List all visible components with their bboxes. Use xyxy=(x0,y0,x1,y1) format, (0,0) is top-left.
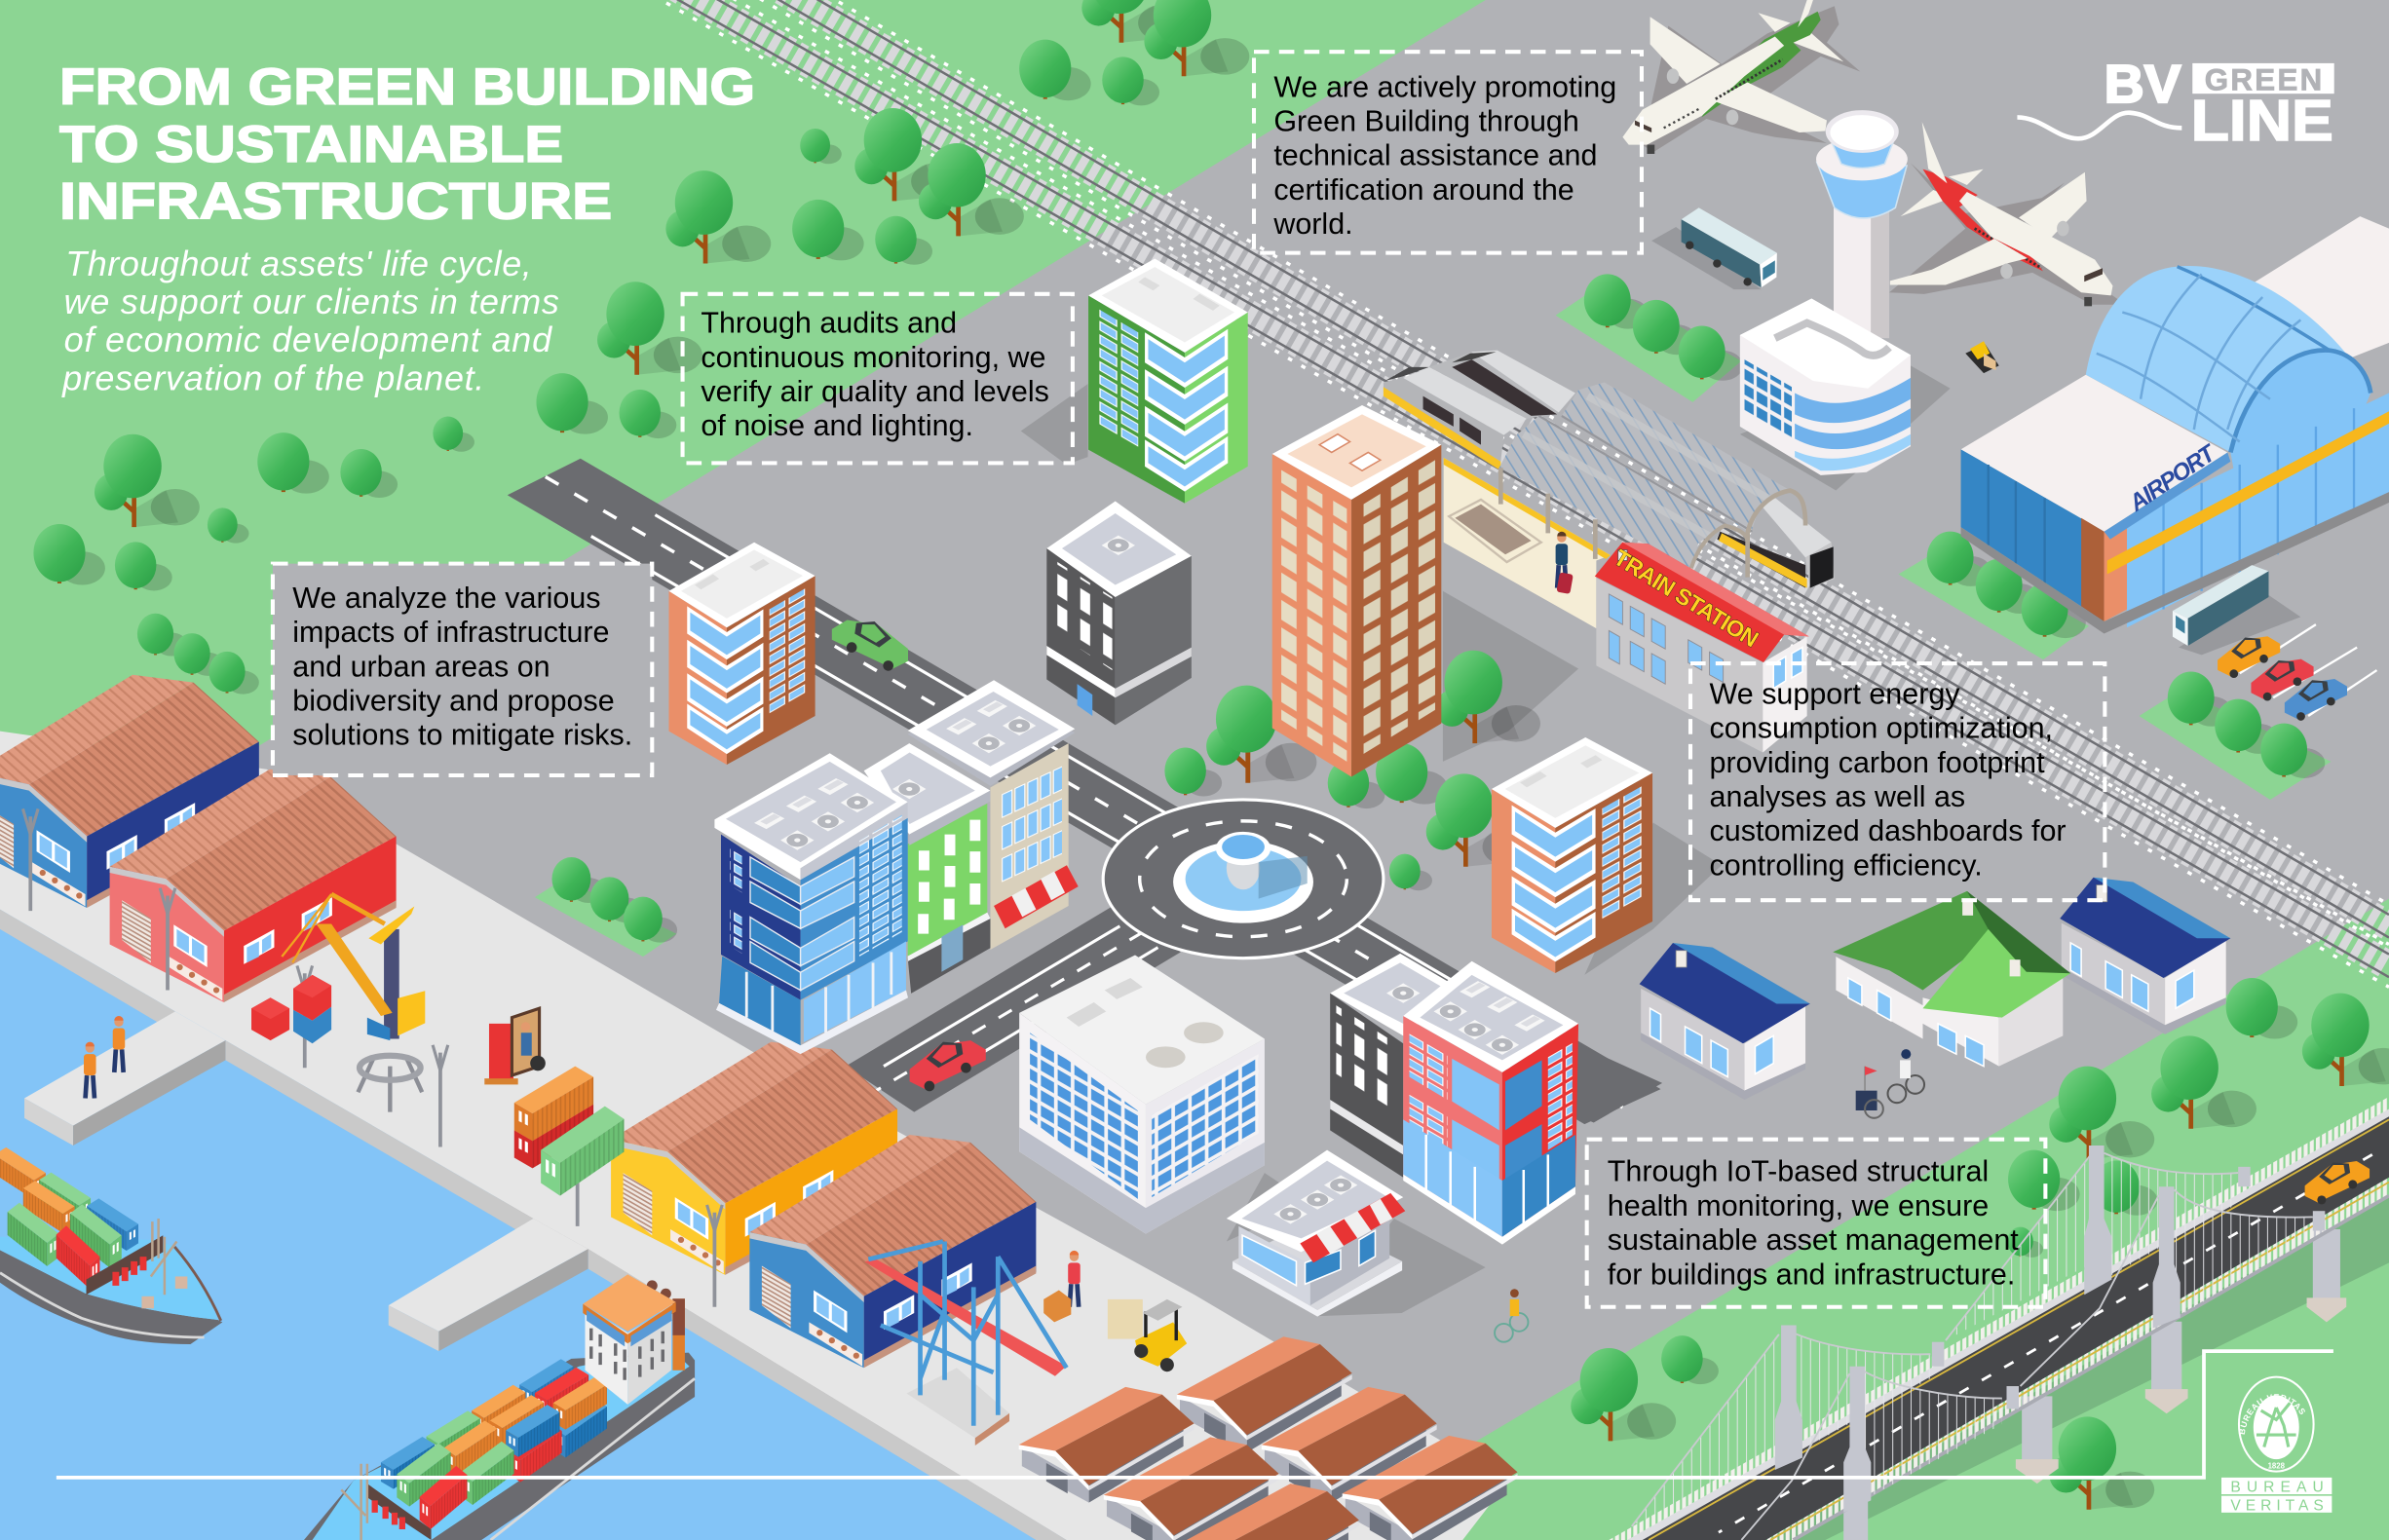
glass dome xyxy=(2086,266,2370,503)
callout: biodiversity: We analyze the various xyxy=(292,582,601,615)
cyclist with trailer xyxy=(1856,1049,1924,1118)
subtitle: we support our clients in terms xyxy=(64,282,559,321)
station platform xyxy=(1444,458,1611,628)
taxi on bridge xyxy=(2305,1161,2370,1204)
callout: energy optimization: analyses as well as xyxy=(1710,780,1965,813)
callout: green building promotion: world. xyxy=(1272,207,1353,241)
tower: tall orange xyxy=(1272,405,1441,777)
plane: green livery xyxy=(1622,0,1860,154)
airport sign: AIRPORT xyxy=(2124,439,2222,517)
street cars xyxy=(832,620,986,1091)
station shelters xyxy=(1499,383,1805,578)
callout: air quality monitoring: of noise and lighting. xyxy=(701,409,973,442)
trees: lower right park xyxy=(1571,978,2389,1510)
building: corner shop xyxy=(1227,1150,1405,1317)
callout: structural health monitoring: health monitoring, we ensure xyxy=(1608,1189,1989,1222)
callout: air quality monitoring: continuous monitoring, we xyxy=(701,341,1046,374)
trees: upper park xyxy=(33,0,1249,695)
callout: structural health monitoring: Through IoT-based structural xyxy=(1608,1155,1989,1188)
airport shuttle bus top xyxy=(1651,207,1777,289)
terminal roof xyxy=(1961,375,2227,532)
ground: green park top left xyxy=(0,0,1486,903)
callout: green building promotion: certification around the xyxy=(1273,173,1574,207)
hangers and cables xyxy=(1632,1153,2313,1526)
Bureau Veritas logo: BUREAU xyxy=(2230,1480,2324,1496)
subtitle: preservation of the planet. xyxy=(61,357,484,397)
building: green midrise xyxy=(864,743,990,994)
callout: energy optimization: We support energy xyxy=(1710,677,1960,710)
callout: energy optimization: controlling efficiency. xyxy=(1710,848,1983,882)
dock workers xyxy=(84,1016,1081,1307)
callout: energy optimization: customized dashboards for xyxy=(1710,814,2067,847)
house: green roof xyxy=(1833,891,2070,1067)
Bureau Veritas logo: BUREAU VERITAS xyxy=(2240,1394,2305,1435)
tower: small orange xyxy=(668,543,815,765)
callout: biodiversity: impacts of infrastructure xyxy=(292,616,610,649)
grass tiles xyxy=(535,283,2332,957)
parked cars xyxy=(2218,636,2347,721)
BV Green Line logo: LINE xyxy=(2191,89,2333,153)
control tower xyxy=(1816,110,1908,338)
building: blue office xyxy=(714,753,908,1054)
Bureau Veritas logo: 1828 xyxy=(2268,1461,2286,1470)
container ship left xyxy=(0,1147,222,1344)
forklift with red crates xyxy=(484,1008,546,1084)
bridge piers xyxy=(1843,1229,2346,1540)
lamp posts xyxy=(22,808,722,1307)
far car xyxy=(1717,497,1835,588)
container stack centre xyxy=(514,1067,625,1196)
subtitle xyxy=(61,244,559,397)
ground: green park bottom right xyxy=(1310,899,2389,1540)
callout: energy optimization: consumption optimization, xyxy=(1710,712,2053,745)
station sign: TRAIN STATION xyxy=(1610,545,1763,653)
footer frame line xyxy=(57,1351,2333,1478)
containers near crane xyxy=(251,975,331,1043)
Bureau Veritas logo: VERITAS xyxy=(2230,1497,2324,1514)
suspension bridge xyxy=(1609,1097,2389,1540)
striped awning xyxy=(1300,1193,1405,1262)
main title: FROM GREEN BUILDING xyxy=(59,58,755,116)
roundabout with fountain xyxy=(1103,800,1384,958)
tower: green xyxy=(1088,259,1248,504)
callout: structural health monitoring xyxy=(1587,1140,2045,1307)
callout: green building promotion: We are actively promoting xyxy=(1273,70,1616,103)
harbour crane xyxy=(282,894,425,1112)
pylons xyxy=(1775,1146,2325,1513)
BV Green Line logo: GREEN xyxy=(2205,62,2322,96)
main title: INFRASTRUCTURE xyxy=(59,172,612,230)
callout: structural health monitoring: for buildings and infrastructure. xyxy=(1608,1258,2015,1291)
cyclist on path xyxy=(1495,1289,1528,1342)
callout: energy optimization: providing carbon footprint xyxy=(1710,746,2045,779)
building: dark grey annex xyxy=(1330,954,1462,1178)
callout: biodiversity: solutions to mitigate risks. xyxy=(292,719,632,752)
warehouse: blue upper xyxy=(0,675,259,908)
ship bridge tower xyxy=(583,1274,685,1405)
upper railing xyxy=(1609,1097,2389,1540)
callout: air quality monitoring: Through audits and xyxy=(701,307,957,340)
subtitle: Throughout assets' life cycle, xyxy=(65,244,532,283)
callout: biodiversity: and urban areas on xyxy=(292,650,550,683)
callout: biodiversity: biodiversity and propose xyxy=(292,685,615,718)
callout: air quality monitoring xyxy=(683,294,1073,463)
airport terminal xyxy=(1961,216,2389,634)
BV Green Line logo: BV xyxy=(2105,54,2181,114)
blue gantry crane xyxy=(864,1241,1067,1446)
front car xyxy=(1384,367,1527,470)
deck xyxy=(1636,1115,2389,1540)
warehouse: blue lower xyxy=(749,1135,1036,1368)
train xyxy=(1384,351,1835,588)
Bureau Veritas logo xyxy=(2221,1375,2332,1514)
bridge ground shadow xyxy=(1767,1196,2389,1540)
tower: right orange xyxy=(1492,737,1652,973)
house: blue left xyxy=(1640,943,1810,1100)
main road xyxy=(508,459,1661,1124)
subtitle: of economic development and xyxy=(64,319,552,359)
plane: red livery xyxy=(1889,122,2125,306)
building: beige shop xyxy=(908,680,1079,950)
callout: green building promotion: Green Building through xyxy=(1273,104,1579,137)
forklift at airport xyxy=(1965,341,1999,373)
yellow forklift xyxy=(1108,1299,1187,1371)
white hangar back xyxy=(2238,216,2389,365)
tower: dark grey xyxy=(1046,501,1192,725)
warehouse: red xyxy=(110,770,397,1002)
BV Green Line logo xyxy=(2017,54,2334,153)
sheds xyxy=(1019,1336,1518,1540)
callout: air quality monitoring: verify air quality and levels xyxy=(701,375,1049,408)
building shadows xyxy=(1021,365,2203,1316)
houses xyxy=(1640,878,2230,1100)
rear car xyxy=(1429,351,1575,419)
callout: green building promotion: technical assistance and xyxy=(1273,139,1597,172)
fountain xyxy=(1173,832,1313,923)
building: red and blue office xyxy=(1403,961,1578,1245)
pallet cart xyxy=(1043,1291,1071,1322)
building: white office xyxy=(1019,955,1265,1234)
main title: TO SUSTAINABLE xyxy=(59,115,563,172)
container ship bottom xyxy=(304,1274,695,1540)
parking lines xyxy=(2205,606,2376,716)
house: blue right xyxy=(2060,878,2230,1034)
train station building xyxy=(1595,543,1809,753)
terminal annex building xyxy=(1740,299,1911,475)
traveller with suitcase xyxy=(1556,532,1574,594)
quay surface and piers xyxy=(0,732,1508,1540)
callout: green building promotion xyxy=(1254,52,1642,253)
main title xyxy=(59,58,755,230)
railway tracks xyxy=(640,0,2389,987)
airport bus bottom xyxy=(2173,565,2300,655)
warehouse: yellow xyxy=(611,1042,897,1275)
trees: street planting xyxy=(551,274,2325,943)
harbor water xyxy=(0,899,1067,1540)
striped awning xyxy=(994,865,1079,928)
callout: biodiversity xyxy=(273,564,652,775)
callout: energy optimization xyxy=(1690,663,2105,900)
callout: structural health monitoring: sustainable asset management xyxy=(1608,1223,2019,1257)
